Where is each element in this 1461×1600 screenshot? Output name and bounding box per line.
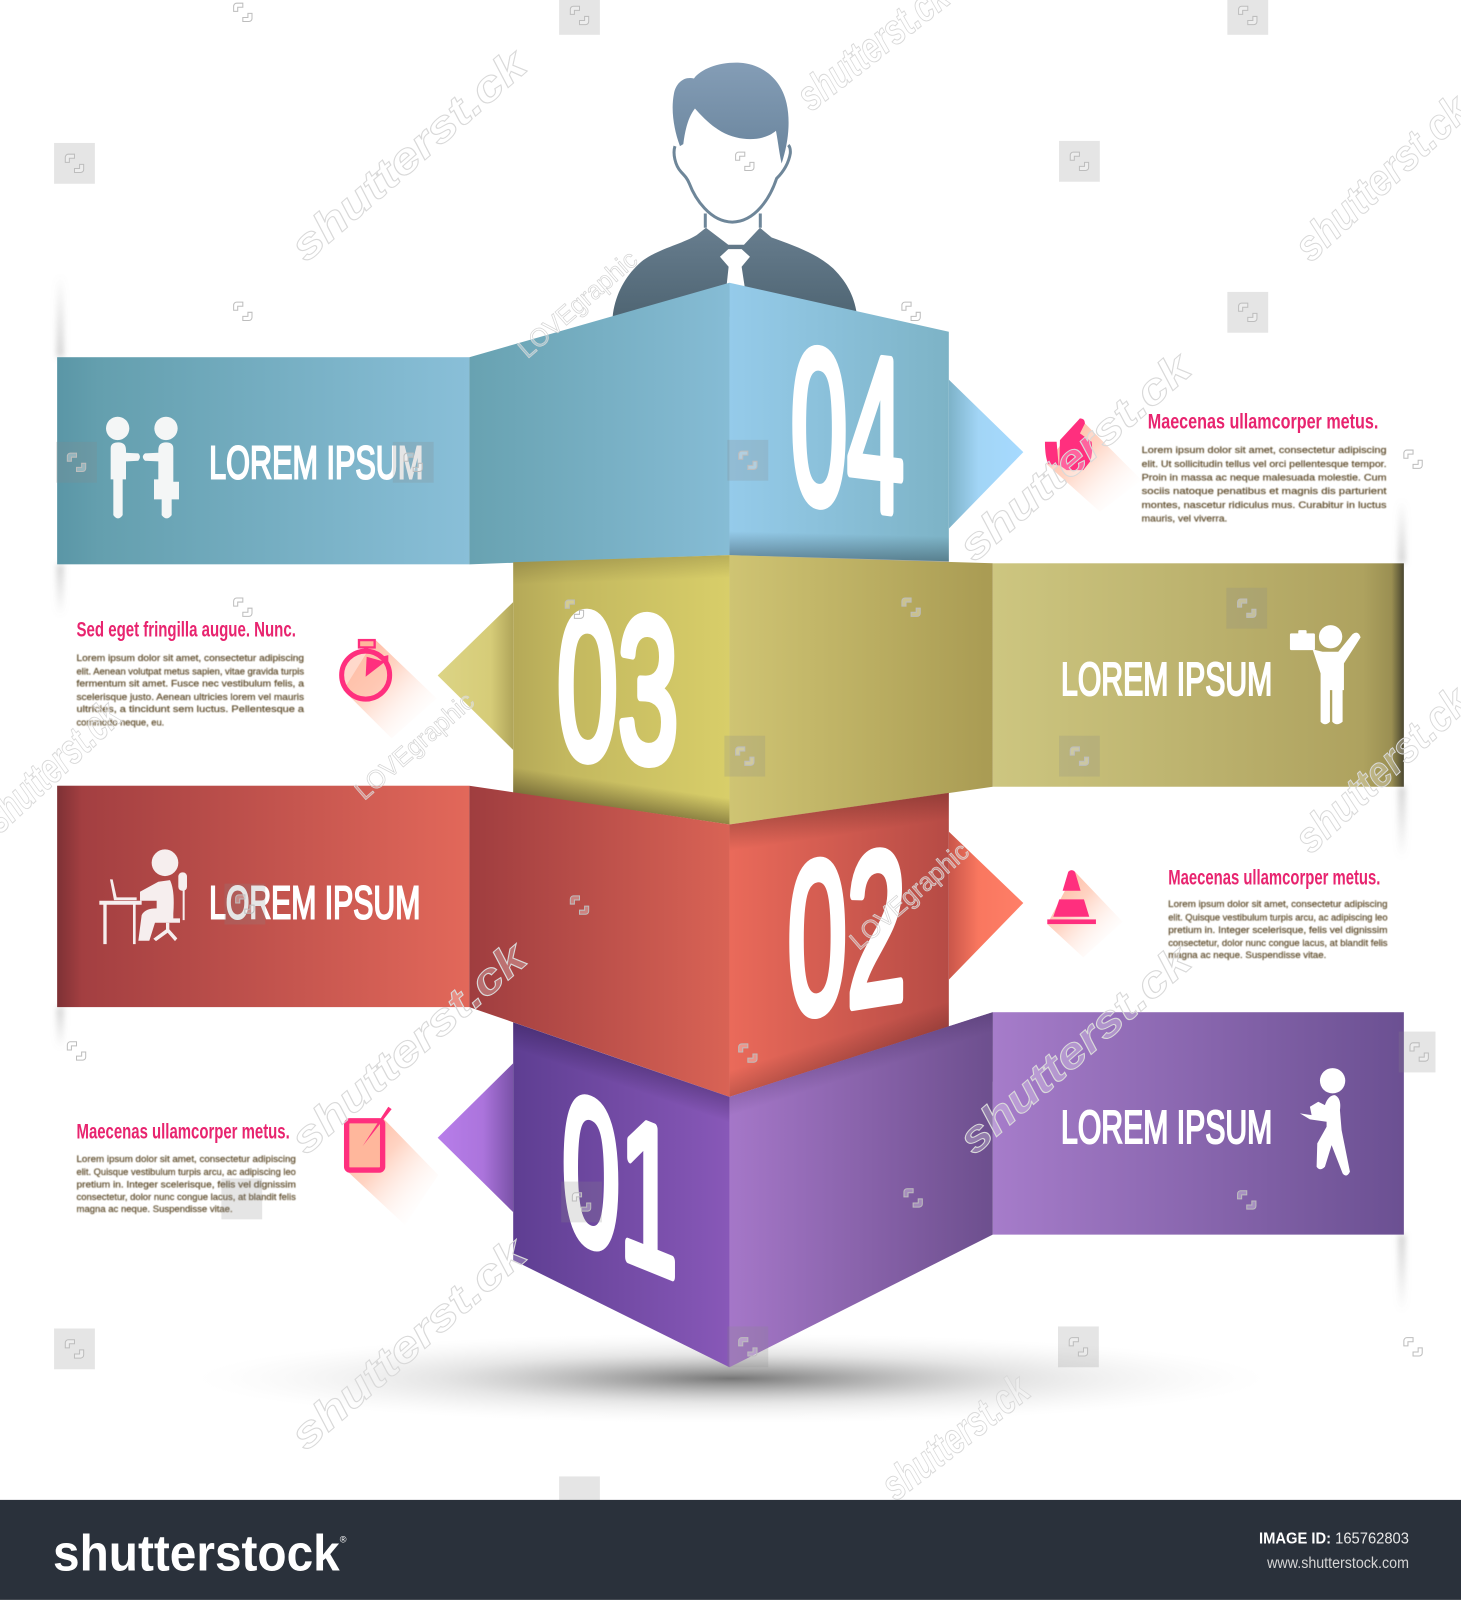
band 3: olive xyxy=(438,555,1404,824)
fold left 2 xyxy=(469,786,729,1097)
arrow 3 xyxy=(438,602,513,750)
body 3: Lorem ipsum dolor sit amet, consectetur adipiscing xyxy=(77,653,304,663)
watermarks: LOVEgraphic xyxy=(845,837,975,956)
watermarks: shutterst.ck xyxy=(281,1227,538,1459)
heading 4: Maecenas ullamcorper metus. xyxy=(1148,410,1378,434)
body 4: sociis natoque penatibus et magnis dis parturient xyxy=(1142,486,1387,496)
band 2: red xyxy=(57,786,1023,1097)
text: 04 xyxy=(791,303,904,560)
body 3: elit. Aenean volutpat metus sapien, vitae gravida turpis xyxy=(77,667,304,677)
side edge shadows xyxy=(57,276,1405,1311)
icon: worker at desk xyxy=(99,849,187,944)
flat panel 3 xyxy=(993,563,1404,787)
band titles xyxy=(209,437,1272,1153)
body 3: ultricies, a tincidunt sem luctus. Pellentesque a xyxy=(77,704,305,714)
neck and face outline xyxy=(674,145,790,228)
band 1: purple xyxy=(438,1012,1404,1367)
fold left 4 xyxy=(469,283,729,564)
icon: walking worker xyxy=(1300,1068,1350,1176)
watermarks: shutterst.ck xyxy=(281,932,538,1164)
title 4: LOREM IPSUM xyxy=(209,437,423,489)
website: www.shutterstock.com xyxy=(1266,1555,1409,1572)
icon: pink hand xyxy=(1045,418,1142,512)
body 2: pretium in. Integer scelerisque, felis vel dignissim xyxy=(1168,925,1388,935)
number 01: 01 xyxy=(562,1047,677,1321)
footer bar xyxy=(0,1500,1461,1600)
numbers xyxy=(557,303,906,1321)
flat panel 2 xyxy=(57,786,469,1007)
watermarks: shutterst.ck xyxy=(949,935,1202,1164)
image id: IMAGE ID: 165762803 xyxy=(1259,1531,1409,1548)
body 4: mauris, vel viverra. xyxy=(1142,513,1227,523)
body 1: magna ac neque. Suspendisse vitae. xyxy=(77,1204,233,1214)
body 2: magna ac neque. Suspendisse vitae. xyxy=(1168,950,1326,960)
fold right 1 xyxy=(729,1012,993,1166)
icon: handshake xyxy=(106,417,179,518)
registered mark: ® xyxy=(340,1535,347,1545)
fold left 1 xyxy=(513,1022,729,1367)
body 1: pretium in. Integer scelerisque, felis vel dignissim xyxy=(77,1179,296,1189)
body 1: consectetur, dolor nunc congue lacus, at blandit felis xyxy=(77,1192,296,1202)
arrow 4 xyxy=(949,380,1023,529)
body 4: Proin in massa ac neque malesuada molestie. Cum xyxy=(1142,473,1387,483)
body 4 xyxy=(1142,445,1387,523)
icon: stopwatch xyxy=(342,639,437,738)
text block 4 xyxy=(1142,410,1387,523)
watermarks: LOVEgraphic xyxy=(513,245,643,364)
icon: traffic cone xyxy=(1047,870,1123,957)
icon: winner with briefcase xyxy=(1290,625,1361,724)
text: 02 xyxy=(788,804,906,1062)
fold left 3 xyxy=(513,555,729,824)
body 3 xyxy=(77,653,305,728)
body 4: elit. Ut sollicitudin tellus vel orci pellentesque tempor. xyxy=(1142,459,1387,469)
body 2 xyxy=(1168,899,1388,960)
body 3: fermentum sit amet. Fusce nec vestibulum felis, a xyxy=(77,679,305,689)
title 2: LOREM IPSUM xyxy=(209,876,420,928)
watermarks: shutterst.ck xyxy=(281,39,538,271)
tie xyxy=(720,249,750,288)
body 1: elit. Quisque vestibulum turpis arcu, ac adipiscing leo xyxy=(77,1167,296,1177)
watermark logos xyxy=(65,3,1428,1358)
ground shadow xyxy=(196,1334,1267,1423)
shoulders xyxy=(613,228,857,317)
fold right 4 xyxy=(729,283,949,561)
band 4: blue xyxy=(57,283,1023,564)
body 4: Lorem ipsum dolor sit amet, consectetur adipiscing xyxy=(1142,445,1387,455)
fold right 2 xyxy=(729,793,949,1097)
title 1: LOREM IPSUM xyxy=(1061,1101,1272,1153)
body 2: Lorem ipsum dolor sit amet, consectetur adipiscing xyxy=(1168,899,1388,909)
body 1: Lorem ipsum dolor sit amet, consectetur adipiscing xyxy=(77,1154,296,1164)
text block 1 xyxy=(77,1120,296,1214)
footer logo: shutterstock xyxy=(53,1524,340,1581)
title 3: LOREM IPSUM xyxy=(1061,653,1272,705)
text block 3 xyxy=(77,618,305,728)
hair xyxy=(673,63,789,163)
arrow 1 xyxy=(438,1063,513,1212)
icon: notepad and pen xyxy=(346,1107,438,1225)
flat panel 4 xyxy=(57,357,469,564)
body 3: commodo neque, eu. xyxy=(77,718,164,728)
body 4: montes, nascetur ridiculus mus. Curabitur in luctus xyxy=(1142,500,1387,510)
body 2: consectetur, dolor nunc congue lacus, at blandit felis xyxy=(1168,938,1388,948)
arrow 2 xyxy=(949,832,1023,980)
heading 1: Maecenas ullamcorper metus. xyxy=(77,1120,290,1144)
flat panel 1 xyxy=(993,1012,1404,1235)
watermarks: shutterst.ck xyxy=(872,1364,1040,1510)
watermarks: shutterst.ck xyxy=(949,342,1202,571)
heading 3: Sed eget fringilla augue. Nunc. xyxy=(77,618,296,642)
body 1 xyxy=(77,1154,296,1214)
text block 2 xyxy=(1168,866,1388,960)
watermarks: LOVEgraphic xyxy=(350,687,480,806)
body 3: scelerisque justo. Aenean ultricies lorem vel mauris xyxy=(77,692,304,702)
icon: businessman xyxy=(613,63,857,317)
body 2: elit. Quisque vestibulum turpis arcu, ac adipiscing leo xyxy=(1168,912,1388,922)
number 03: 03 xyxy=(557,569,678,806)
fold right 3 xyxy=(729,555,993,824)
